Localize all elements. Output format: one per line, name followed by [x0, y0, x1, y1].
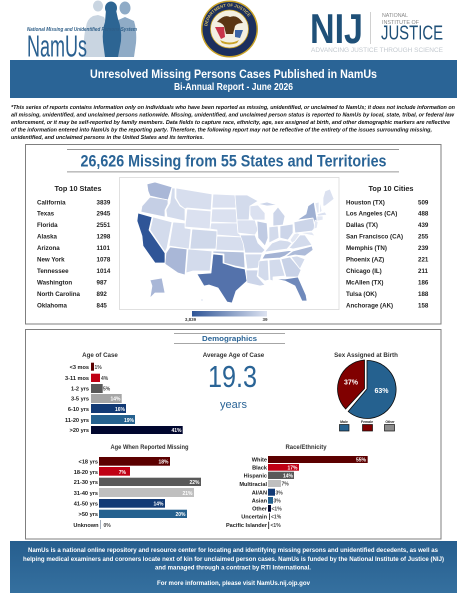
- bar chart: age of case: 4%: [101, 376, 109, 382]
- bar chart: age when reported missing: [73, 444, 201, 529]
- heading: demographics: Demographics: [202, 336, 257, 343]
- table: top 10 cities: Memphis (TN): [346, 245, 387, 252]
- panel: missing persons map: [26, 144, 441, 324]
- table: top 10 cities: 239: [418, 245, 429, 252]
- bar chart: race and ethnicity: 3%: [276, 490, 283, 496]
- bar chart: age of case: 3-11 mos: [65, 376, 89, 382]
- bar chart: race and ethnicity: Race/Ethnicity: [286, 444, 327, 451]
- bar chart: race and ethnicity: 55%: [356, 458, 367, 464]
- bar chart: age of case: Age of Case: [82, 352, 118, 359]
- disclaimer text: unidentified, and unclaimed persons in the United States and its territories.: [11, 135, 204, 141]
- bar chart: age when reported missing: Age When Reported Missing: [110, 444, 189, 451]
- bar chart: age when reported missing: 22%: [189, 480, 200, 486]
- logo: NamUs: NamUs: [27, 28, 87, 64]
- logo: NIJ: NIJ: [310, 5, 363, 52]
- table: top 10 cities: Dallas (TX): [346, 222, 378, 229]
- table: top 10 cities: 509: [418, 200, 429, 206]
- table: top 10 cities: Tulsa (OK): [346, 291, 377, 298]
- bar chart: age when reported missing: 21%: [182, 491, 193, 497]
- table: top 10 cities: 255: [418, 234, 429, 240]
- title: Unresolved Missing Persons Cases Published in NamUs: [90, 67, 377, 81]
- footer banner: [10, 541, 457, 593]
- footer banner: NamUs is a national online repository and resource center for locating and identifying missing persons and unidentified decedents, as well as: [28, 548, 439, 554]
- bar chart: age when reported missing: 31-40 yrs: [74, 491, 98, 497]
- table: top 10 cities: 158: [418, 302, 429, 310]
- bar chart: race and ethnicity: Hispanic: [244, 474, 267, 480]
- bar chart: age of case: [65, 352, 183, 434]
- table: top 10 cities: 186: [418, 280, 429, 286]
- bar chart: age of case: 11-20 yrs: [65, 418, 89, 424]
- table: top 10 cities: 488: [418, 210, 429, 218]
- logo: DOJ seal: [201, 0, 258, 58]
- heading: demographics: [174, 333, 285, 344]
- bar chart: race and ethnicity: 17%: [287, 466, 298, 472]
- footer banner: For more information, please visit NamUs.nij.ojp.gov: [157, 581, 311, 587]
- bar chart: age when reported missing: <18 yrs: [79, 460, 98, 466]
- bar chart: age when reported missing: 18%: [158, 460, 169, 466]
- table: top 10 cities: 221: [418, 256, 429, 264]
- legend: sex: Male: [340, 420, 348, 424]
- table: top 10 states: 845: [96, 302, 107, 310]
- bar chart: race and ethnicity: 14%: [283, 474, 294, 480]
- bar chart: race and ethnicity: Other: [252, 506, 268, 512]
- bar chart: age when reported missing: 7%: [119, 470, 127, 476]
- table: top 10 cities: [346, 186, 429, 310]
- bar chart: age of case: 14%: [110, 396, 121, 402]
- bar chart: race and ethnicity: <1%: [271, 514, 282, 520]
- bar chart: age of case: 3-5 yrs: [71, 396, 89, 402]
- pie chart: sex assigned at birth: 37%: [344, 380, 359, 386]
- table: top 10 cities: Anchorage (AK): [346, 302, 393, 310]
- choropleth map: [120, 178, 339, 310]
- bar chart: age of case: 19%: [124, 418, 135, 424]
- disclaimer text: all missing, unidentified, and unclaimed persons nationwide. Missing, unidentified, and unclaimed person status is reported to NamUs by local, state, tribal, or federal law: [11, 112, 455, 118]
- legend: sex: [340, 420, 395, 431]
- table: top 10 states: 2551: [96, 222, 111, 229]
- stat: average age of case: Average Age of Case: [203, 352, 265, 359]
- map legend: [185, 311, 268, 322]
- disclaimer text: [11, 105, 456, 141]
- bar chart: race and ethnicity: Uncertain: [241, 514, 268, 520]
- panel: demographics: [26, 330, 441, 539]
- table: top 10 cities: Los Angeles (CA): [346, 210, 397, 218]
- bar chart: race and ethnicity: [226, 444, 368, 529]
- table: top 10 cities: 439: [418, 222, 429, 229]
- stat: average age of case: [203, 352, 265, 411]
- bar chart: race and ethnicity: 3%: [274, 498, 281, 504]
- footer banner: and managed through a contract by RTI International.: [155, 566, 311, 572]
- bar chart: race and ethnicity: <1%: [272, 506, 282, 512]
- bar chart: age of case: 5%: [103, 386, 111, 392]
- footer banner: helping medical examiners and coroners locate next of kin for unclaimed person cases. NamUs is funded by the National Institute of Justice (NIJ): [23, 557, 444, 563]
- bar chart: race and ethnicity: Pacific Islander: [226, 523, 268, 529]
- logo: NIJ: INSTITUTE OF: [382, 20, 420, 26]
- table: top 10 cities: 188: [418, 291, 429, 298]
- bar chart: age when reported missing: 41-50 yrs: [74, 502, 98, 508]
- table: top 10 states: 892: [96, 291, 107, 298]
- logo: NIJ: ADVANCING JUSTICE THROUGH SCIENCE: [311, 48, 443, 54]
- map legend: 3,839: [185, 317, 197, 322]
- disclaimer text: of the information entered into NamUs by the reporting party. Therefore, the following report may not be reflective of the entirety of the issues surrounding missing,: [11, 128, 432, 134]
- logo: NIJ: NATIONAL: [382, 13, 408, 19]
- subtitle: Bi-Annual Report - June 2026: [174, 82, 293, 93]
- table: top 10 states: [37, 186, 111, 310]
- bar chart: race and ethnicity: 7%: [282, 482, 289, 488]
- table: top 10 states: Alaska: [37, 234, 58, 240]
- table: top 10 states: 2945: [96, 210, 111, 218]
- bar chart: age when reported missing: >50 yrs: [79, 512, 98, 518]
- bar chart: age of case: 41%: [171, 428, 182, 434]
- table: top 10 states: Texas: [37, 210, 55, 218]
- table: top 10 states: 1101: [96, 245, 110, 252]
- bar chart: age when reported missing: 0%: [104, 523, 111, 529]
- table: top 10 states: 987: [96, 280, 107, 286]
- bar chart: race and ethnicity: Black: [252, 466, 268, 472]
- table: top 10 cities: McAllen (TX): [346, 280, 383, 286]
- logo: NamUs: [27, 0, 137, 64]
- table: top 10 states: North Carolina: [37, 291, 81, 298]
- disclaimer text: enforcement, or it may be self-reported by family members. Data fields to capture race, ethnicity, age, sex assigned at birth, and other demographic markers are reflective: [11, 120, 450, 126]
- table: top 10 cities: Top 10 Cities: [368, 186, 414, 193]
- bar chart: age of case: 1-2 yrs: [71, 386, 89, 392]
- bar chart: race and ethnicity: White: [252, 458, 267, 464]
- bar chart: age of case: 6-10 yrs: [68, 407, 89, 413]
- bar chart: age when reported missing: Unknown: [73, 523, 99, 529]
- bar chart: age when reported missing: 18-20 yrs: [74, 470, 98, 476]
- bar chart: age of case: 16%: [115, 407, 126, 413]
- icon: silhouettes: [84, 0, 136, 57]
- bar chart: age of case: 1%: [94, 365, 102, 371]
- table: top 10 states: Tennessee: [37, 268, 69, 275]
- table: top 10 states: Oklahoma: [37, 302, 67, 310]
- table: top 10 cities: Phoenix (AZ): [346, 256, 384, 264]
- legend: sex: Female: [361, 420, 373, 424]
- stat: average age of case: 19.3: [208, 359, 257, 394]
- table: top 10 cities: 211: [418, 268, 429, 275]
- bar chart: age when reported missing: 20%: [175, 512, 186, 518]
- bar chart: age when reported missing: 21-30 yrs: [74, 480, 98, 486]
- table: top 10 states: Washington: [37, 280, 72, 286]
- table: top 10 states: 1298: [96, 234, 111, 240]
- legend: sex: Other: [385, 420, 395, 424]
- heading: missing count: 26,626 Missing from 55 States and Territories: [80, 152, 386, 170]
- bar chart: race and ethnicity: AI/AN: [252, 490, 267, 496]
- logo: NIJ: [310, 5, 443, 54]
- stat: average age of case: years: [220, 399, 247, 411]
- bar chart: race and ethnicity: <1%: [270, 523, 281, 529]
- table: top 10 states: 1078: [96, 256, 111, 264]
- table: top 10 states: California: [37, 200, 66, 206]
- logo: DOJ seal: DEPARTMENT OF JUSTICE: [204, 4, 251, 26]
- logo: NamUs: National Missing and Unidentified Persons System: [27, 27, 137, 33]
- table: top 10 states: 1014: [96, 268, 111, 275]
- logo: NIJ: JUSTICE: [381, 22, 443, 44]
- disclaimer text: *This series of reports contains information only on individuals who have been reported as missing, unidentified, or unclaimed to NamUs; it does not include information on: [11, 105, 456, 111]
- bar chart: age when reported missing: 14%: [153, 502, 164, 508]
- table: top 10 cities: Chicago (IL): [346, 268, 382, 275]
- table: top 10 cities: Houston (TX): [346, 200, 385, 206]
- bar chart: age of case: >20 yrs: [70, 428, 89, 434]
- table: top 10 states: New York: [37, 256, 65, 264]
- pie chart: sex assigned at birth: 63%: [374, 388, 389, 395]
- pie chart: sex assigned at birth: [334, 352, 398, 431]
- table: top 10 cities: San Francisco (CA): [346, 234, 403, 240]
- table: top 10 states: Top 10 States: [54, 186, 102, 193]
- table: top 10 states: Florida: [37, 222, 58, 229]
- pie chart: sex assigned at birth: Sex Assigned at Birth: [334, 352, 398, 359]
- map legend: 39: [262, 317, 268, 322]
- bar chart: age of case: <3 mos: [70, 365, 89, 371]
- bar chart: race and ethnicity: Asian: [252, 498, 268, 504]
- table: top 10 states: Arizona: [37, 245, 60, 252]
- bar chart: race and ethnicity: Multiracial: [239, 482, 267, 488]
- table: top 10 states: 3839: [96, 200, 111, 206]
- title banner: [10, 60, 457, 98]
